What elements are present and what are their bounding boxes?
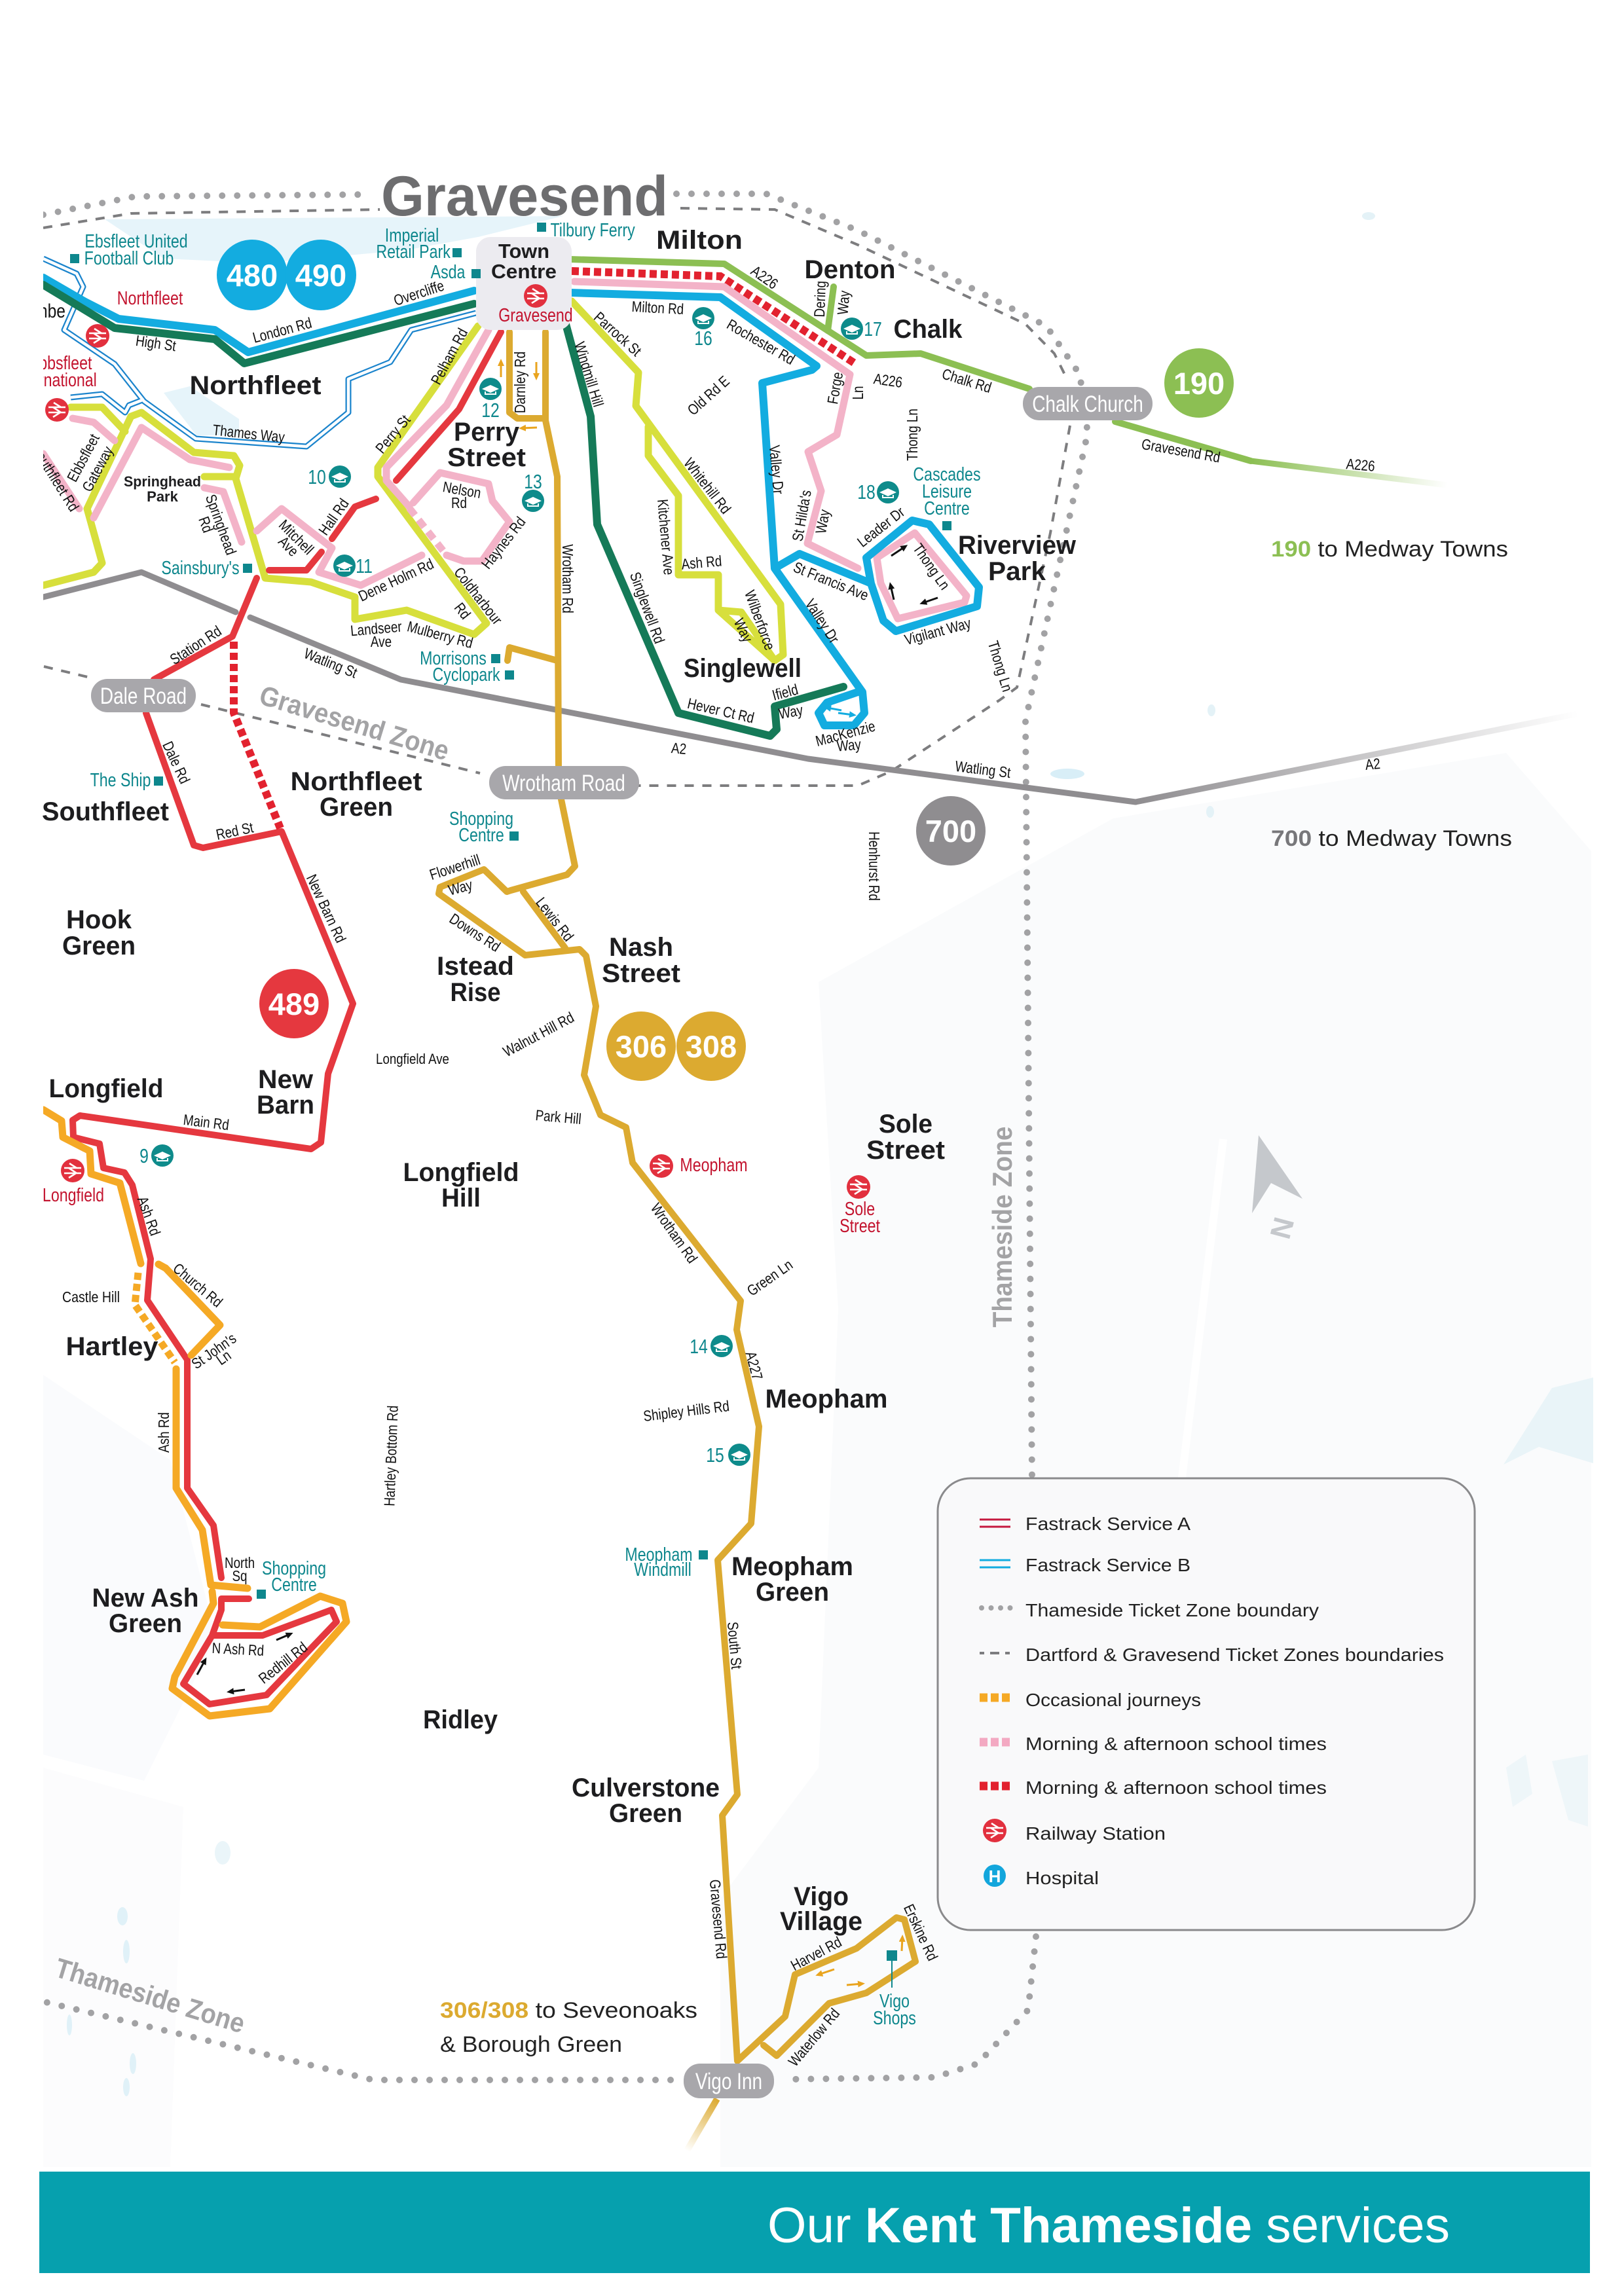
place: Northfleet Green [291, 767, 422, 822]
place: Culverstone Green: Green [609, 1799, 682, 1828]
school 14: 14 [690, 1335, 708, 1358]
zone label: Thameside Zone bottom: Thameside Zone [52, 1952, 249, 2039]
road name labels: Whitehill Rd [680, 455, 733, 517]
road name labels: Walnut Hill Rd [500, 1010, 577, 1061]
road name labels: Red St [215, 820, 255, 843]
road name labels: Dering [811, 281, 829, 318]
place: New Barn [257, 1065, 314, 1120]
legend: Hospital [984, 1865, 1099, 1888]
pink dashed link [409, 508, 447, 555]
place: Nash Street [602, 933, 680, 988]
road name labels: Redhill Rd [256, 1639, 311, 1687]
route badge 190 [1164, 348, 1234, 418]
Sole Street station: Sole [845, 1197, 875, 1220]
Meopham Windmill: Windmill [634, 1558, 692, 1580]
road name labels: Darnley Rd [512, 352, 528, 413]
Cascades Leisure Centre: Leisure [922, 480, 972, 502]
Imperial Retail Park [376, 224, 462, 263]
Thameside ticket zone boundary, dotted [43, 194, 1088, 2080]
legend: red school times: Morning & afternoon school times [1025, 1777, 1327, 1798]
panel: Town Centre hub: Gravesend [498, 304, 573, 326]
icon: north arrow: N [1264, 1214, 1301, 1243]
title: Gravesend: Gravesend [381, 165, 668, 228]
Shopping Centre, New Ash Green [257, 1557, 326, 1599]
road name labels: St Hilda's [790, 489, 815, 543]
road name labels: Valley Dr [766, 445, 786, 495]
place: Milton: Milton [656, 226, 743, 255]
road name labels: Wrotham Rd [647, 1201, 700, 1266]
Shopping Centre, New Ash Green: Shopping [262, 1557, 326, 1579]
road name labels: Chalk Rd [940, 366, 993, 397]
place: New Ash Green: New Ash [92, 1584, 199, 1613]
road name labels: Way [777, 702, 805, 723]
road name labels: Forge [824, 371, 847, 405]
stop pill: Chalk Church: Chalk Church [1032, 391, 1143, 417]
road name labels: Erskine Rd [900, 1902, 940, 1963]
legend: Fastrack Service A: Fastrack Service A [1025, 1514, 1190, 1534]
road name labels: St Francis Ave [791, 559, 871, 604]
route badge 190: 190 [1173, 366, 1225, 401]
lime Parrock St [572, 301, 783, 661]
road name labels: Thong Ln [904, 409, 921, 461]
route badge 700 [916, 796, 986, 866]
school 11 [333, 555, 373, 577]
place: Meopham Green: Meopham [731, 1552, 853, 1581]
place: Sole Street: Street [866, 1136, 945, 1165]
Meopham station: Meopham [680, 1154, 748, 1176]
Longfield station: Longfield [43, 1184, 104, 1206]
Riverview pink loop [877, 533, 967, 619]
stop pill: Vigo Inn [684, 2064, 774, 2098]
lime route west [43, 326, 487, 634]
place: Riverview Park: Park [988, 557, 1046, 586]
gold route 306/308 [439, 332, 915, 2061]
Meopham station [650, 1154, 748, 1178]
road name labels: Thong Ln [910, 541, 953, 593]
Imperial Retail Park: Imperial [385, 224, 439, 246]
road name labels: Longfield Ave [376, 1052, 449, 1067]
school 18: 18 [857, 481, 876, 503]
school 9 [139, 1144, 174, 1167]
road name labels: Hall Rd [316, 496, 352, 538]
school 12: 12 [481, 399, 500, 422]
panel: Town Centre hub [476, 237, 573, 330]
road name labels: Gravesend Rd [1140, 436, 1221, 466]
Vigo Shops [873, 1950, 916, 2029]
Shopping Centre, New Ash Green: Centre [271, 1573, 317, 1595]
road name labels: Ln [213, 1347, 234, 1368]
legend: Hospital: H [989, 1867, 1001, 1886]
road name labels: Ash Rd [156, 1412, 172, 1453]
direction arrows [197, 362, 938, 1985]
road name labels: Leader Dr [855, 504, 908, 551]
Sainsbury's: Sainsbury's [161, 556, 240, 579]
place: Ridley: Ridley [423, 1705, 498, 1734]
stop pill: Chalk Church [1023, 387, 1153, 420]
road name labels: Gateway [79, 444, 117, 494]
road name labels: Vigilant Way [903, 615, 973, 649]
road name labels: Southfleet Rd [28, 443, 82, 515]
road name labels: Dene Holm Rd [356, 556, 436, 605]
route badge 489: 489 [268, 987, 320, 1021]
road name labels: Haynes Rd [479, 514, 529, 572]
road name labels: Watling St [954, 758, 1012, 782]
orange dashed occasional [135, 1273, 175, 1362]
place: Southfleet: Southfleet [42, 797, 169, 826]
road name labels: Thong Ln [984, 639, 1015, 694]
road name labels: Sq [232, 1568, 248, 1584]
place: Longfield Hill: Longfield [403, 1158, 519, 1187]
route badge 308 [676, 1011, 746, 1081]
Thames Way route 490 thin line [43, 259, 476, 446]
callout: 306/308 to Sevenoaks and Borough Green: & Borough Green [440, 2032, 622, 2057]
road name labels: Way [730, 616, 756, 645]
Vigo Shops: Shops [873, 2007, 916, 2029]
road name labels: Park Hill [535, 1107, 582, 1128]
place: Hook Green: Hook [66, 905, 132, 934]
route 490 dark green along High St [43, 285, 474, 363]
road name labels: Mulberry Rd [405, 619, 475, 652]
place: Meopham Green [731, 1552, 853, 1607]
place: Perry Street [447, 418, 526, 472]
Shopping Centre, Istead: Shopping [449, 807, 513, 829]
school 18 [857, 481, 899, 503]
place: Chalk: Chalk [893, 315, 963, 344]
road name labels: A227 [742, 1350, 766, 1382]
road name labels: Ave [275, 534, 301, 560]
place names [42, 226, 1077, 1936]
road name labels: A2 [1365, 756, 1381, 773]
Sole Street station: Street [840, 1214, 881, 1237]
road name labels: Ash Rd [681, 553, 722, 573]
road name labels: Church Rd [170, 1260, 225, 1311]
road name labels: Flowerhill [428, 852, 483, 883]
Vigo Shops: Vigo [879, 1990, 910, 2012]
route badge 306: 306 [616, 1029, 667, 1064]
Ebsfleet United Football Club: Ebsfleet United [84, 230, 188, 252]
road name labels: A226 [748, 263, 781, 293]
stop pill: Dale Road: Dale Road [100, 683, 187, 709]
place: Istead Rise [437, 952, 514, 1007]
road name labels: Castle Hill [62, 1289, 120, 1305]
road name labels: Pelham Rd [428, 326, 471, 388]
Shopping Centre, Istead [449, 807, 519, 846]
place: Meopham: Meopham [765, 1385, 888, 1413]
road name labels: Ifield [771, 682, 800, 704]
Shopping Centre, Istead: Centre [458, 824, 504, 846]
Ebbsfleet International station: Ebbsfleet [29, 352, 92, 374]
place: Northfleet: Northfleet [190, 371, 321, 400]
school 14 [690, 1335, 733, 1358]
Asda: Asda [431, 261, 466, 283]
road name labels: Rd [451, 495, 467, 511]
Cascades Leisure Centre: Centre [924, 497, 970, 519]
road name labels [0, 263, 1381, 2070]
railway stations in red [13, 287, 881, 1237]
road name labels: Thames Way [212, 422, 286, 446]
school 12 [479, 378, 502, 422]
callout: 306/308 to Sevenoaks and Borough Green [440, 1998, 697, 2057]
road name labels: Downs Rd [447, 911, 503, 955]
place: Northfleet Green: Northfleet [291, 767, 422, 796]
road name labels: Rd [195, 515, 216, 535]
road name labels: Milton Rd [631, 299, 684, 318]
school 15 [706, 1444, 750, 1467]
school 9: 9 [139, 1144, 149, 1167]
school 17: 17 [864, 318, 882, 340]
route badge 700: 700 [925, 814, 976, 848]
place: Riverview Park: Riverview [958, 531, 1077, 560]
Ebsfleet United Football Club [70, 230, 188, 269]
route badge 306 [606, 1011, 676, 1081]
legend: Railway Station: Railway Station [1025, 1823, 1166, 1844]
callout: 700 to Medway Towns: 700 to Medway Towns [1271, 826, 1512, 851]
school 13 [522, 470, 544, 512]
road name labels: Way [447, 877, 475, 899]
place: Sole Street [866, 1110, 945, 1165]
place: Longfield Hill: Hill [441, 1184, 481, 1212]
Meopham Windmill [625, 1543, 708, 1580]
place: New Barn: Barn [257, 1091, 314, 1120]
route 480 cyan along London Rd [43, 278, 474, 352]
legend: Thameside boundary: Thameside Ticket Zone boundary [1025, 1600, 1319, 1620]
road name labels: N Ash Rd [212, 1640, 265, 1660]
place: Longfield Hill [403, 1158, 519, 1212]
Meopham Windmill: Meopham [625, 1543, 693, 1565]
Asda [431, 261, 481, 283]
school markers [139, 307, 899, 1467]
route badge 480 [217, 240, 287, 310]
Gravesend ticket zone boundary, dashed [43, 208, 1070, 786]
Morrisons and Cyclopark [420, 647, 514, 685]
Milton pink [574, 282, 858, 568]
road name labels: Coldharbour [451, 564, 505, 628]
stop pill: Wrotham Road: Wrotham Road [502, 770, 625, 796]
route badge 490 [286, 240, 356, 310]
place: Springhead Park [124, 473, 201, 505]
road name labels: A226 [872, 371, 904, 391]
place: Springhead Park: Park [147, 488, 179, 505]
place: Istead Rise: Istead [437, 952, 514, 981]
school 16 [692, 307, 714, 350]
road name labels: Rochester Rd [724, 316, 798, 369]
cyan Fastrack B [570, 293, 979, 725]
pink school routes [43, 330, 509, 585]
Longfield station [43, 1159, 104, 1206]
The Ship: The Ship [90, 769, 151, 791]
Tilbury Ferry: Tilbury Ferry [550, 219, 636, 241]
school 15: 15 [706, 1444, 724, 1467]
route badge 480: 480 [227, 258, 278, 293]
Northfleet station [86, 287, 183, 348]
road name labels: Mitchell [276, 517, 317, 558]
route badge 490: 490 [295, 258, 346, 293]
stop pill: Wrotham Road [489, 766, 639, 799]
icon: north arrow [1252, 1135, 1302, 1243]
road name labels: Harvel Rd [788, 1934, 845, 1974]
footer banner: Our Kent Thameside services [767, 2198, 1450, 2253]
place: Hook Green [62, 905, 136, 960]
school 10 [308, 465, 351, 488]
A2 Watling St trunk road [43, 572, 1135, 802]
red dashed school journey [234, 642, 280, 828]
place: Perry Street: Street [447, 443, 526, 472]
school 13: 13 [524, 470, 542, 493]
road name labels: Springhead [202, 492, 239, 557]
road name labels: Station Rd [167, 623, 225, 668]
place: Northfleet Green: Green [320, 793, 393, 822]
panel: Town Centre hub: Centre [491, 260, 557, 283]
Ebbsfleet International station: International [13, 369, 97, 391]
road name labels: Gravesend Rd [706, 1879, 729, 1959]
place: Denton: Denton [804, 255, 896, 284]
callout: 190 to Medway Towns: 190 to Medway Towns [1271, 537, 1508, 562]
place: Vigo Village: Village [780, 1907, 862, 1936]
road name labels: Nelson [441, 479, 482, 501]
road name labels: Ebbsfleet [64, 431, 103, 484]
road name labels: A226 [1346, 456, 1376, 475]
place: New Barn: New [258, 1065, 314, 1094]
legend: Occasional journeys: Occasional journeys [1025, 1690, 1201, 1710]
road name labels: Shipley Hills Rd [642, 1398, 730, 1425]
route 490 dark green Singlewell [566, 324, 843, 736]
route badge 489 [259, 969, 329, 1038]
place: Vigo Village: Vigo [794, 1882, 849, 1911]
zone label: Thameside Zone vertical: Thameside Zone [987, 1126, 1018, 1328]
legend: Fastrack Service B: Fastrack Service B [1025, 1555, 1190, 1575]
Imperial Retail Park: Retail Park [376, 240, 451, 263]
A2 fading east [1135, 714, 1578, 802]
road name labels: MacKenzie [814, 718, 877, 750]
road name labels: Perry St [373, 412, 414, 457]
road name labels: A2 [671, 740, 687, 757]
legend: Railway Station [983, 1819, 1166, 1844]
footer banner [39, 2172, 1590, 2273]
road name labels: Hever Ct Rd [686, 695, 756, 727]
Milton Rd school route dashed red [572, 271, 856, 364]
Northfleet station: Northfleet [117, 287, 183, 309]
lime stubs [71, 407, 236, 477]
school 10: 10 [308, 465, 326, 488]
route 190 A226 [570, 259, 1251, 461]
Cascades Leisure Centre [913, 463, 981, 530]
place: New Ash Green [92, 1584, 199, 1638]
road name labels: Dale Rd [159, 739, 193, 786]
road name labels: Parrock St [591, 309, 644, 360]
road name labels: Overcliffe [392, 278, 446, 309]
road name labels: South St [724, 1621, 745, 1670]
Morrisons and Cyclopark: Morrisons [420, 647, 487, 669]
place: Nash Street: Nash [609, 933, 673, 962]
road name labels: Ash Rd [134, 1194, 163, 1238]
Cascades Leisure Centre: Cascades [913, 463, 981, 485]
orange route Longfield to New Ash Green [43, 1110, 346, 1716]
road name labels: Ln [850, 386, 866, 399]
callout: 306/308 to Sevenoaks and Borough Green: 306/308 to Seveonoaks [440, 1998, 697, 2023]
red route 489 Gravesend to Perry St [73, 332, 501, 1704]
road name labels: Wrotham Rd [559, 544, 576, 613]
road name labels: High St [135, 333, 177, 355]
road name labels: Kitchener Ave [654, 499, 677, 575]
panel: Town Centre hub: Town [498, 240, 549, 263]
Ebsfleet United Football Club: Football Club [84, 247, 174, 269]
place: Hook Green: Green [62, 932, 136, 960]
road name labels: Windmill Hill [571, 340, 606, 409]
road name labels: Landseer [350, 619, 403, 640]
road name labels: North [225, 1555, 255, 1571]
legend: Hospital: Hospital [1025, 1868, 1099, 1888]
legend: Dartford and Gravesend boundaries: Dartford & Gravesend Ticket Zones boundaries [1025, 1645, 1444, 1665]
place: Singlewell: Singlewell [684, 654, 802, 683]
road name labels: Hartley Bottom Rd [382, 1405, 401, 1506]
place: Culverstone Green [572, 1774, 720, 1828]
road name labels: Way [835, 289, 853, 316]
place: Sole Street: Sole [879, 1110, 932, 1139]
gold fade beyond Vigo Inn [687, 2099, 717, 2151]
road name labels: Lewis Rd [532, 894, 576, 945]
Morrisons and Cyclopark: Cyclopark [433, 663, 500, 685]
place: Riverview Park [958, 531, 1077, 586]
place: Longfield: Longfield [48, 1074, 164, 1103]
road name labels: Waterlow Rd [785, 2005, 843, 2070]
Dering Way branch [828, 287, 834, 331]
road name labels: London Rd [251, 315, 314, 346]
road name labels: Watling St [301, 646, 360, 682]
school 11: 11 [356, 555, 373, 577]
road name labels: Henhurst Rd [866, 831, 882, 901]
stop pill: Dale Road [91, 679, 196, 712]
school 16: 16 [694, 327, 712, 350]
Sole Street station [840, 1175, 881, 1237]
zone label: Gravesend Zone: Gravesend Zone [256, 680, 453, 766]
route 190 fade [1251, 461, 1447, 485]
road name labels: Green Ln [745, 1256, 796, 1300]
route badge 308: 308 [686, 1029, 737, 1064]
road name labels: Way [813, 508, 834, 535]
road name labels: Way [836, 737, 862, 755]
points of interest in teal [70, 219, 981, 2029]
road name labels: Ave [371, 634, 392, 650]
road name labels: St John's [189, 1330, 240, 1373]
road name labels: Singlewell Rd [626, 570, 667, 646]
legend: pink school times: Morning & afternoon school times [1025, 1734, 1327, 1754]
road name labels: Rd [451, 600, 473, 623]
stop pill: Vigo Inn: Vigo Inn [695, 2068, 762, 2094]
school 17 [841, 318, 882, 340]
road name labels: New Barn Rd [303, 872, 349, 945]
place: Perry Street: Perry [454, 418, 520, 446]
place: Springhead Park: Springhead [124, 473, 201, 490]
road name labels: Main Rd [183, 1112, 230, 1134]
place: Istead Rise: Rise [451, 978, 500, 1007]
road name labels: Valley Dr [802, 596, 842, 646]
place: Hartley: Hartley [65, 1332, 158, 1361]
place: Vigo Village [780, 1882, 862, 1936]
road name labels: Wilberforce [741, 588, 778, 653]
road name labels: Old Rd E [684, 373, 733, 419]
Ebbsfleet International station [13, 352, 97, 422]
place: Meopham Green: Green [756, 1578, 829, 1607]
place: New Ash Green: Green [109, 1609, 182, 1638]
panel: legend [938, 1478, 1475, 1930]
place: Nash Street: Street [602, 959, 680, 988]
place: Culverstone Green: Culverstone [572, 1774, 720, 1802]
